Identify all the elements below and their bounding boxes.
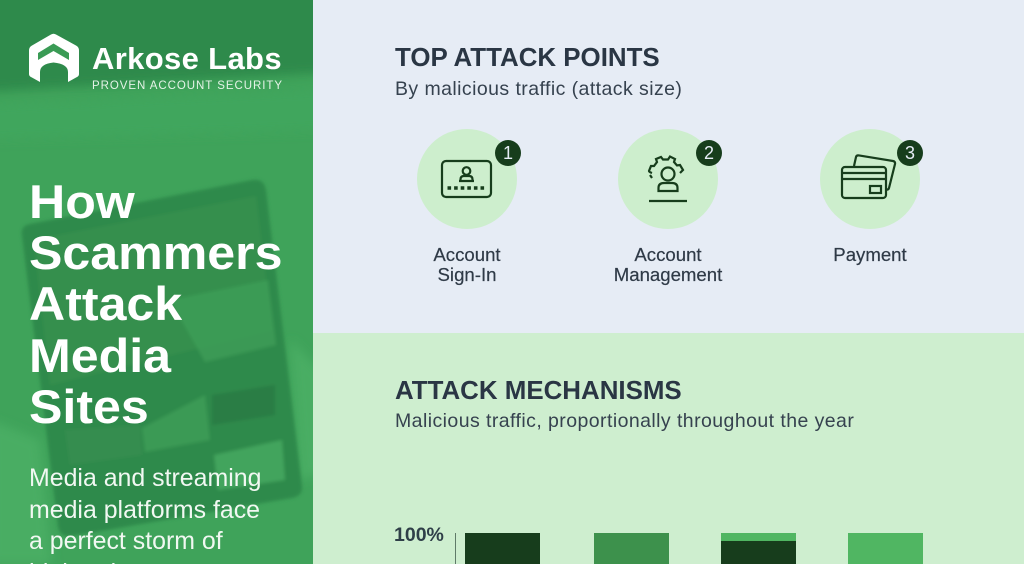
y-axis label: 100% (394, 524, 444, 546)
icon: payment cards (820, 129, 920, 229)
label (433, 244, 501, 286)
stacked bar chart (394, 524, 923, 564)
label: Payment (833, 244, 907, 265)
title (29, 176, 283, 434)
rank badge 2: 2 (704, 143, 714, 163)
bar 2 (594, 533, 669, 564)
bar 4 (848, 533, 923, 564)
label (614, 244, 722, 286)
panel: attack mechanisms (313, 333, 1024, 564)
rank badge 1: 1 (503, 143, 513, 163)
title: Media (29, 330, 171, 383)
rank badge 3: 3 (905, 143, 915, 163)
attack point 3 (820, 129, 923, 266)
subheading: By malicious traffic (attack size) (395, 78, 682, 100)
y-axis line (455, 533, 456, 564)
rank badge 1 (495, 140, 521, 166)
icon: Arkose shield (29, 34, 79, 82)
icon: account management (618, 129, 718, 229)
tagline: PROVEN ACCOUNT SECURITY (92, 80, 283, 92)
rank badge 2 (696, 140, 722, 166)
bar 3 (721, 533, 796, 564)
intro text: media platforms face (29, 496, 260, 524)
attack point 1 (417, 129, 521, 286)
icon: account sign-in (417, 129, 517, 229)
logo: Arkose Labs (29, 34, 283, 92)
panel: top attack points (313, 0, 1024, 333)
intro text (29, 464, 261, 564)
title: Scammers (29, 227, 283, 280)
subheading: Malicious traffic, proportionally throughout the year (395, 410, 854, 432)
title: Attack (29, 278, 182, 331)
title: How (29, 176, 135, 229)
panel: left hero sidebar (0, 0, 313, 564)
label: Account (634, 244, 702, 265)
heading: top attack points: TOP ATTACK POINTS (395, 44, 660, 72)
heading: attack mechanisms: ATTACK MECHANISMS (395, 377, 682, 405)
label: Management (614, 264, 722, 285)
intro text: Media and streaming (29, 464, 261, 492)
bar 1 (465, 533, 540, 564)
intro text: a perfect storm of (29, 527, 223, 555)
label: Account (433, 244, 501, 265)
title: Sites (29, 381, 149, 434)
attack point 2 (614, 129, 722, 286)
label: Sign-In (438, 264, 496, 285)
brand name: Arkose Labs (92, 41, 282, 76)
rank badge 3 (897, 140, 923, 166)
hero background photo: tablet in hands (0, 0, 313, 561)
